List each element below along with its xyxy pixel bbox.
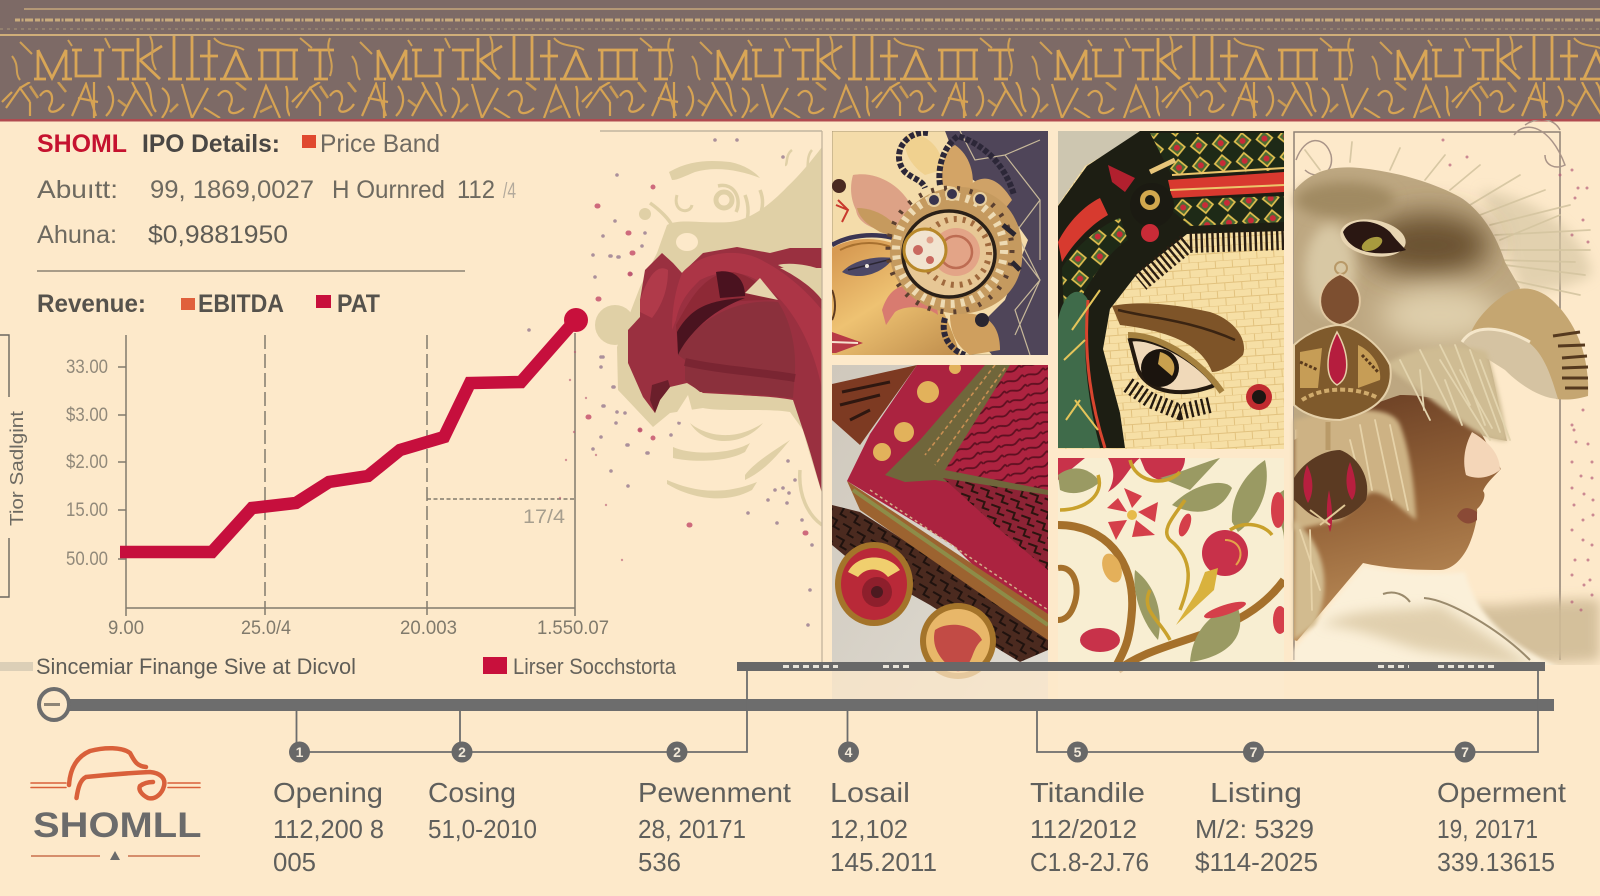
timeline step: Losail: 12,102 (830, 814, 908, 844)
data line (120, 324, 572, 552)
purple backdrop (945, 131, 1048, 355)
brown cloth (832, 365, 917, 445)
medallion two (920, 603, 996, 679)
row: Abuitt: 112 (457, 176, 495, 204)
node 6: 7 (1250, 744, 1258, 760)
fur crest tuft (1480, 190, 1592, 292)
centre clasp (1108, 158, 1176, 211)
timeline step: Opening: 112,200 8 (273, 814, 384, 844)
brow (1112, 303, 1244, 372)
logo mark (31, 748, 200, 798)
node 5: 5 (1074, 744, 1082, 760)
chart legend: Revenue, EBITDA, PAT: EBITDA (198, 290, 284, 318)
y-axis labels: 33.00 (66, 357, 108, 378)
y-axis labels (66, 357, 108, 570)
gold tendrils (1060, 460, 1272, 640)
node 6 (1243, 742, 1264, 762)
timeline step: Listing: Listing (1210, 777, 1302, 808)
forehead mark (836, 200, 848, 222)
petals (851, 174, 912, 228)
upper timeline bar (737, 662, 1545, 671)
header ornamental band (0, 0, 1600, 122)
timeline step: Losail: Losail (830, 777, 910, 808)
timeline step: Cosing (428, 777, 537, 844)
eye (1128, 335, 1222, 412)
timeline step: Operment: 339.13615 (1437, 847, 1555, 877)
panel: ornate eye with headband (1058, 131, 1284, 449)
node 5 (1067, 742, 1088, 762)
camel muzzle (1462, 288, 1588, 400)
node 4: 4 (845, 744, 853, 760)
ink splatter: camel side (1443, 140, 1593, 610)
dark patterned cloth (832, 505, 1048, 662)
maroon highlights and shadows (640, 253, 822, 413)
timeline nodes (289, 742, 1476, 762)
main timeline bar (39, 689, 1554, 720)
red cloth (847, 365, 1048, 631)
timeline step: Losail (830, 777, 937, 877)
end point (564, 308, 588, 332)
chart legend: Revenue, EBITDA, PAT: PAT (337, 290, 380, 318)
timeline step: Cosing: 51,0-2010 (428, 814, 537, 844)
timeline step: Losail: 145.2011 (830, 847, 937, 877)
node 2: 2 (458, 744, 466, 760)
y-axis labels: 50.00 (66, 549, 108, 570)
embroidered olive band (885, 365, 1048, 498)
camel eye (1337, 215, 1409, 261)
timeline step: Operment (1437, 777, 1566, 877)
eye (842, 257, 896, 276)
chart legend: Revenue, EBITDA, PAT: Revenue: (37, 290, 146, 318)
row: Ahuna (37, 221, 288, 249)
x-axis labels: 25.0/4 (241, 618, 291, 639)
node 1 (289, 742, 310, 762)
logo wordmark: SHOMLL (33, 806, 202, 845)
lashes on band (1140, 240, 1284, 282)
timeline step: Listing (1195, 777, 1318, 877)
jaw shadow (832, 290, 835, 320)
legend: Price Band: Price Band (320, 130, 440, 158)
illustration: tan swirl and maroon cloth (595, 147, 822, 525)
maroon cloth (628, 247, 822, 493)
flower (1107, 488, 1158, 540)
node 7 (1454, 742, 1476, 762)
shoulder shade (1340, 599, 1600, 665)
pomegranate (1176, 530, 1248, 625)
illustration: camel and woman profile (1294, 120, 1600, 668)
timeline step: Pewenment: 536 (638, 847, 681, 877)
x-axis labels: 20.003 (400, 618, 457, 639)
panel: ornate face with mandala (832, 131, 1048, 355)
headband (1058, 131, 1284, 448)
x-axis labels (108, 618, 609, 639)
node 3 (666, 742, 688, 762)
dark knot fold (943, 478, 1048, 570)
axis title bracket: Tior Sadlgint (7, 411, 27, 526)
node 1: 1 (296, 744, 304, 760)
white garment (1294, 566, 1560, 668)
mandala (888, 187, 1022, 327)
timeline step: Opening: Opening (273, 777, 383, 808)
timeline step: Titandile: 112/2012 (1030, 814, 1137, 844)
heading: IPO Details: IPO Details: (142, 130, 280, 158)
x-axis labels: 1.550.07 (537, 618, 609, 639)
row: Abuitt: H Ournred (332, 176, 445, 204)
lips (832, 332, 863, 353)
red tips (1058, 458, 1185, 492)
timeline step: Titandile: C1.8-2J.76 (1030, 847, 1149, 877)
row: Abuitt: /4 (503, 178, 516, 203)
node 3: 2 (673, 744, 681, 760)
timeline step: Operment: 19, 20171 (1437, 814, 1538, 844)
node 4 (838, 742, 859, 762)
logo underline (31, 851, 200, 860)
timeline step: Listing: $114-2025 (1195, 847, 1318, 877)
legend: Lirser Socchstorta: Lirser Socchstorta (513, 654, 677, 679)
timeline step: Pewenment: 28, 20171 (638, 814, 746, 844)
ink splatter: chart side (529, 140, 812, 625)
camel head (1294, 167, 1520, 441)
gold flowers (873, 362, 961, 461)
leaves (1058, 458, 1284, 662)
gold hem (847, 481, 1048, 640)
fur ruff (1385, 346, 1507, 441)
panel: floral vine (1058, 458, 1284, 673)
small buds (1080, 492, 1287, 652)
timeline step: Opening: 005 (273, 847, 316, 877)
timeline step: Pewenment (638, 777, 791, 877)
y-axis labels: $2.00 (66, 452, 108, 473)
timeline step: Opening (273, 777, 384, 877)
woman's face (1294, 395, 1501, 641)
annotation: 17/4: 17/4 (523, 507, 565, 528)
timeline step: Titandile (1030, 777, 1149, 877)
darker fur on brow (1366, 213, 1490, 277)
face (832, 239, 960, 355)
chart axes and guides (118, 333, 575, 616)
earring (1294, 262, 1391, 532)
text block: IPO details (37, 130, 516, 249)
timeline step: Pewenment: Pewenment (638, 777, 791, 808)
finance note: Sincemiar Finange Sive at Dicvol (36, 654, 356, 679)
tan swirl (595, 147, 822, 498)
timeline step: Titandile: Titandile (1030, 777, 1145, 808)
y-axis labels: 15.00 (66, 500, 108, 521)
nose highlight (1464, 432, 1500, 478)
heading: SHOML: SHOML (37, 130, 127, 158)
bindi (1246, 384, 1272, 410)
line chart (66, 308, 609, 639)
brown vine (1058, 525, 1284, 670)
timeline step: Operment: Operment (1437, 777, 1566, 808)
y-axis labels: $3.00 (66, 405, 108, 426)
node 7: 7 (1461, 744, 1469, 760)
logo: SHOMLL (31, 748, 202, 860)
row: Abuitt: Abuıtt: (37, 176, 118, 204)
timeline connectors (296, 671, 1538, 752)
timeline step: Listing: M/2: 5329 (1195, 814, 1314, 844)
axis title bracket (0, 335, 27, 597)
row: Ahuna: $0,9881950 (148, 221, 288, 249)
row: Abuitt: 99, 1869,0027 (150, 176, 314, 204)
node 2 (452, 742, 472, 762)
medallion one (835, 542, 913, 626)
corner shade (1058, 131, 1145, 205)
row: Abuitt (37, 176, 516, 204)
row: Ahuna: Ahuna: (37, 221, 117, 249)
frame with ornaments (1294, 120, 1565, 660)
chart legend: Revenue, EBITDA, PAT (37, 290, 380, 318)
panel: red textile and medallions (832, 362, 1048, 699)
bead strands (899, 133, 1014, 355)
blond hair (1294, 410, 1416, 640)
timeline step: Cosing: Cosing (428, 777, 516, 808)
x-axis labels: 9.00 (108, 618, 144, 639)
